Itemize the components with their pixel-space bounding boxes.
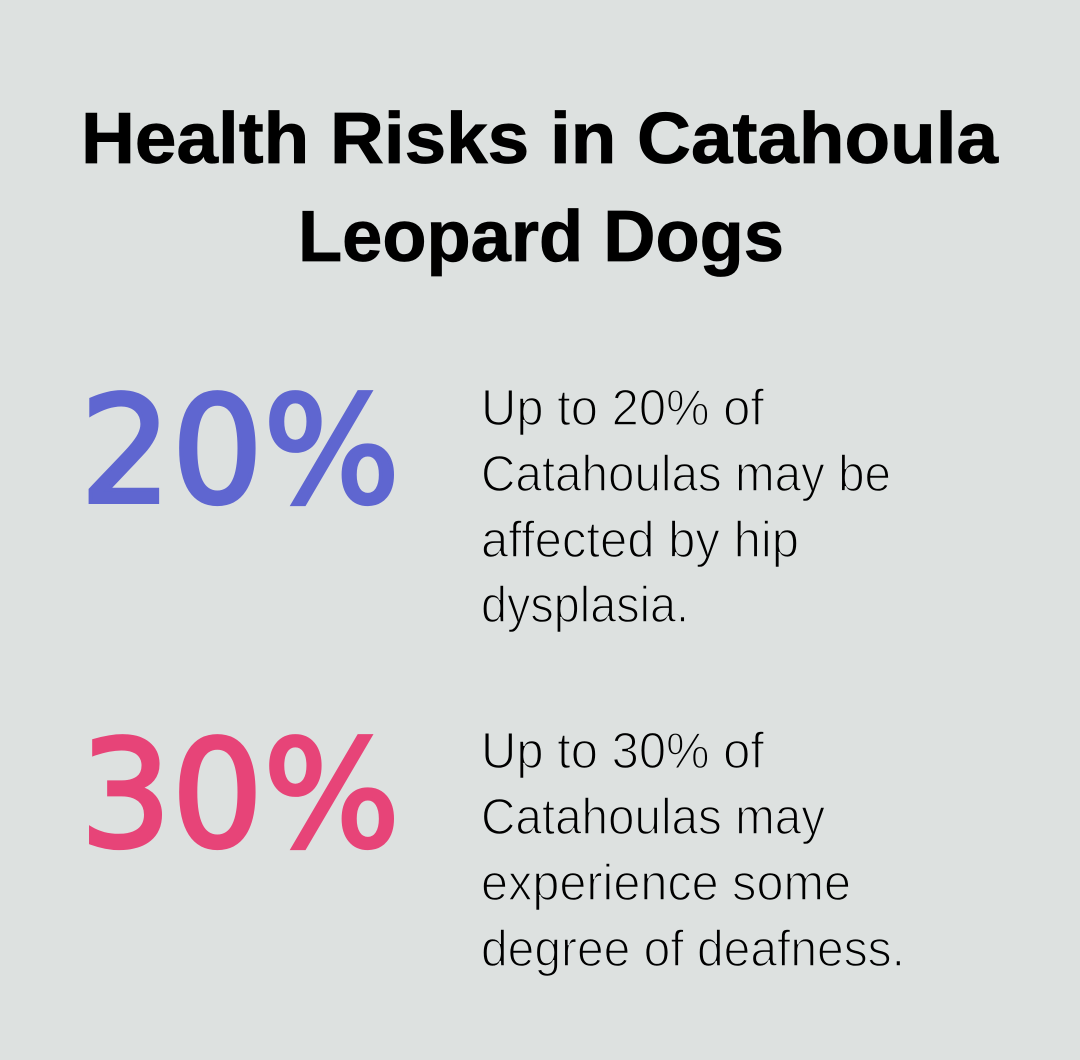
title: Health Risks in Catahoula (81, 99, 999, 179)
text block: hip dysplasia description: Catahoulas may be (481, 445, 891, 502)
title: Leopard Dogs (298, 197, 784, 277)
panel: deafness stat (80, 709, 905, 977)
text block: deafness description: Up to 30% of (481, 722, 765, 779)
stat number: 30%: 30% (80, 709, 400, 881)
text block: deafness description (481, 722, 905, 977)
text block: hip dysplasia description: Up to 20% of (481, 379, 765, 436)
text block: hip dysplasia description: dysplasia. (481, 576, 689, 633)
text block: deafness description: Catahoulas may (481, 788, 825, 845)
stat number: 20%: 20% (80, 365, 400, 537)
panel: hip dysplasia stat (80, 365, 891, 633)
text block: deafness description: degree of deafness. (481, 920, 905, 977)
text block: hip dysplasia description (481, 379, 891, 633)
text block: deafness description: experience some (481, 854, 851, 911)
text block: hip dysplasia description: affected by hip (481, 511, 799, 568)
title (81, 99, 999, 277)
